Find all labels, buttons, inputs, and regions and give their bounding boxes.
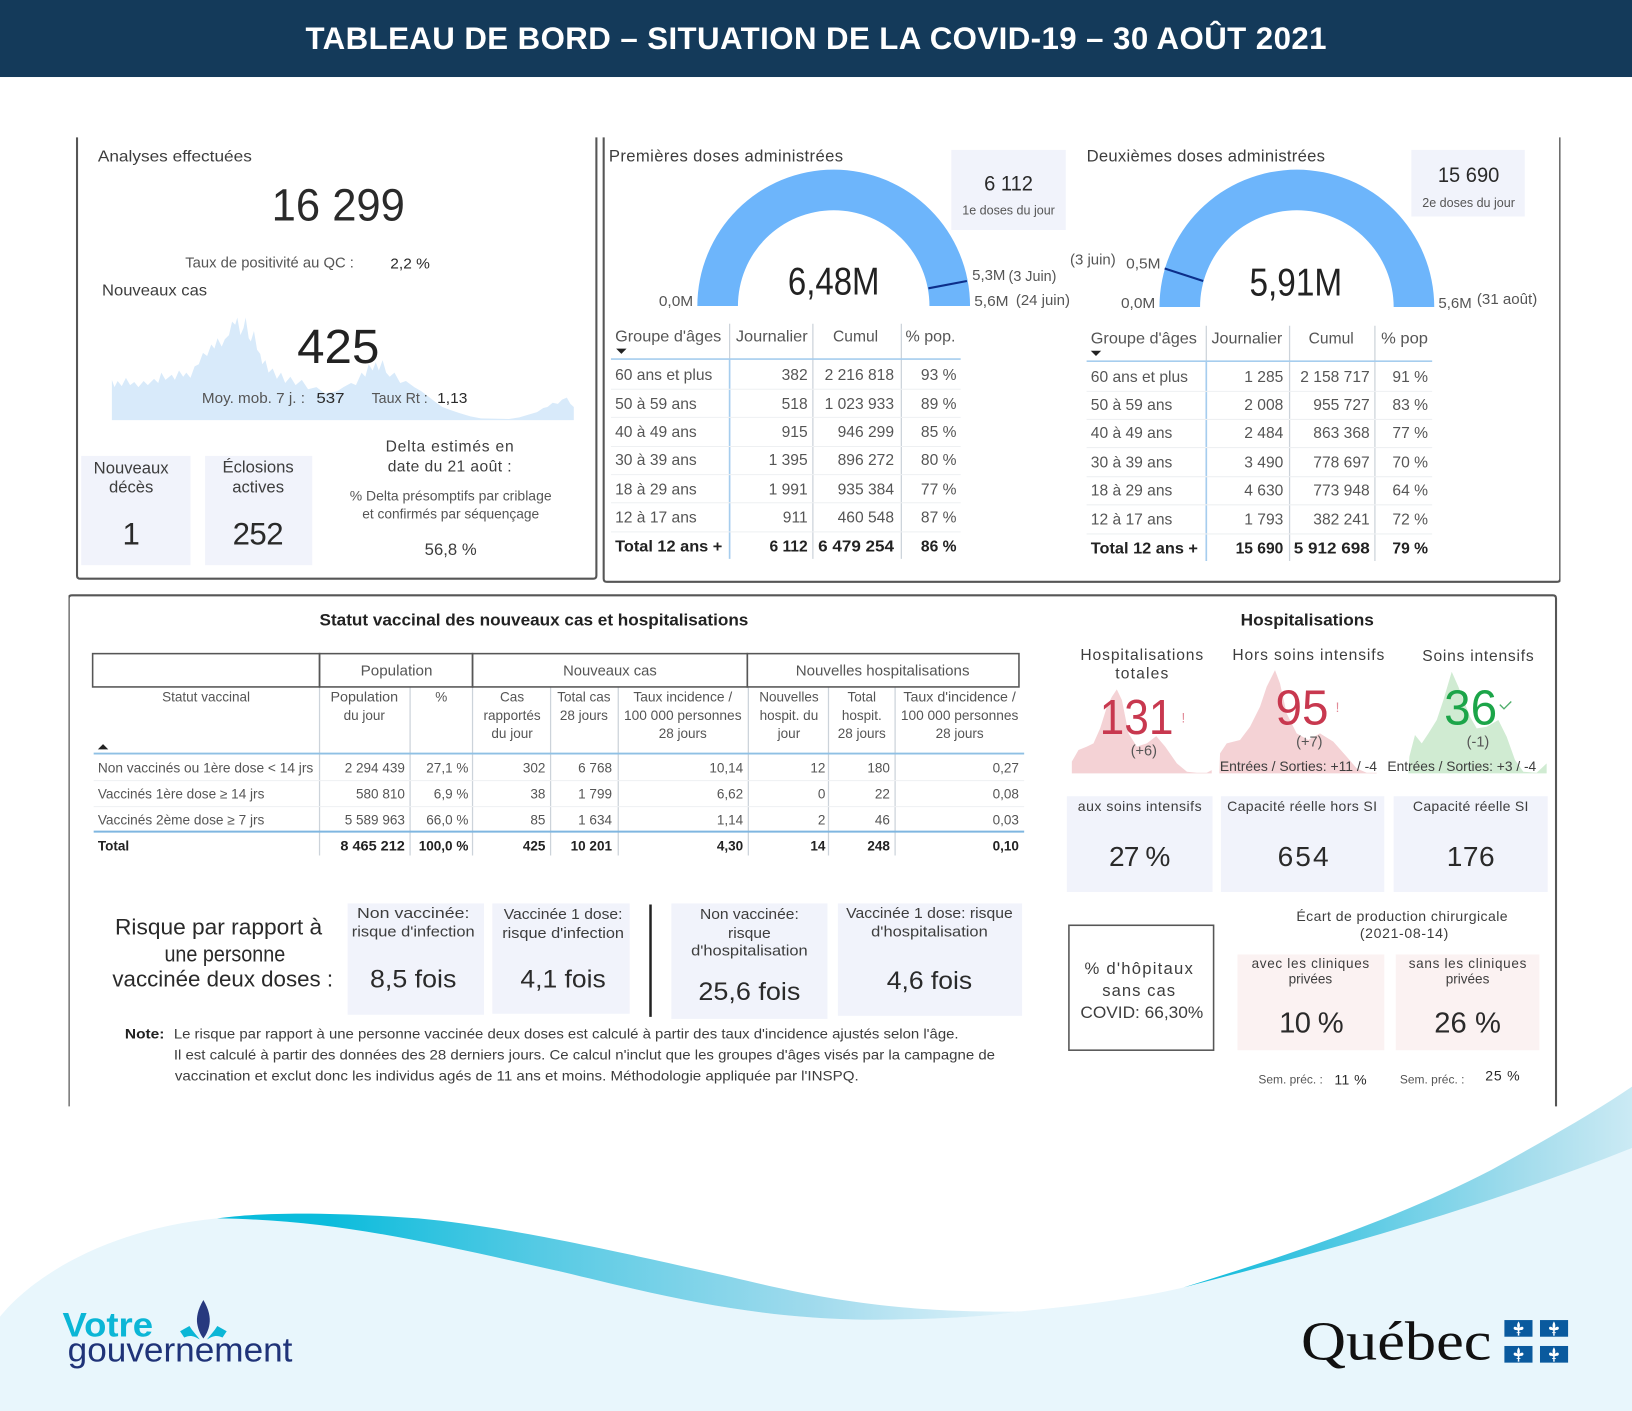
- card: avec les cliniques privées: avec les cliniques: [1252, 956, 1369, 971]
- table: statut vaccinal: 4,30: [717, 838, 743, 853]
- area chart: nouveaux cas: [112, 317, 574, 420]
- card: aux soins intensifs: aux soins intensifs: [1078, 798, 1202, 814]
- table: statut vaccinal: 180: [867, 760, 890, 775]
- table: statut vaccinal: 0: [818, 786, 825, 801]
- note: Le risque par rapport à une personne vaccinée deux doses est calculé à partir des taux d'incidence ajustés selon l'âge.: [174, 1026, 959, 1042]
- header banner: [0, 0, 1632, 77]
- text: semaine précédente: Sem. préc. :: [1400, 1072, 1464, 1086]
- kpi: hospitalisations totales: Hospitalisations: [1080, 647, 1203, 664]
- text block: delta estimés: % Delta présomptifs par criblage: [350, 489, 552, 504]
- text: semaine précédente: Sem. préc. :: [1258, 1072, 1323, 1086]
- table: premières doses par groupe d'âges: 93 %: [921, 367, 957, 384]
- card: risque d'hospitalisation vaccinée 1 dose: [838, 903, 1022, 1016]
- table: statut vaccinal: 0,27: [993, 760, 1019, 775]
- card: risque d'hospitalisation vaccinée 1 dose: 4,6 fois: [887, 967, 972, 995]
- table: deuxièmes doses par groupe d'âges: 773 948: [1313, 482, 1370, 499]
- table: deuxièmes doses par groupe d'âges: Total 12 ans +: [1091, 541, 1198, 558]
- text: taux de positivité: Taux de positivité au QC :: [185, 255, 354, 271]
- table: statut vaccinal: 28 jours: [936, 726, 984, 741]
- table: statut vaccinal: 12: [810, 760, 825, 775]
- gauge: premières doses: 5,3M: [972, 268, 1005, 284]
- card: risque d'hospitalisation non vaccinée: d'hospitalisation: [691, 943, 808, 959]
- table: deuxièmes doses par groupe d'âges: 60 ans et plus: [1091, 369, 1188, 386]
- table: statut vaccinal: Vaccinés 1ère dose ≥ 14 jrs: [98, 786, 265, 801]
- table: statut vaccinal: 425: [523, 838, 546, 853]
- table: statut vaccinal: Total: [98, 838, 129, 853]
- table: deuxièmes doses par groupe d'âges: 70 %: [1392, 454, 1428, 471]
- table: premières doses par groupe d'âges: 87 %: [921, 509, 957, 526]
- gauge: deuxièmes doses: 5,6M: [1438, 296, 1472, 312]
- card: éclosions actives: Éclosions: [223, 458, 294, 477]
- kpi: hors soins intensifs: [1219, 647, 1384, 774]
- card: sans les cliniques privées: privées: [1446, 972, 1490, 987]
- card: capacité réelle SI: Capacité réelle SI: [1413, 798, 1528, 814]
- table: statut vaccinal: 6 768: [578, 760, 612, 775]
- gauge: premières doses: [659, 170, 1070, 310]
- gauge: deuxièmes doses: [1070, 170, 1537, 312]
- kpi: soins intensifs: [1387, 648, 1547, 774]
- table: statut vaccinal: 248: [867, 838, 890, 853]
- card: capacité réelle hors SI: [1221, 796, 1384, 892]
- table: statut vaccinal: Statut vaccinal: [162, 690, 250, 705]
- table: statut vaccinal: du jour: [491, 726, 533, 741]
- kpi: soins intensifs: Soins intensifs: [1422, 648, 1534, 665]
- table: statut vaccinal: 0,03: [993, 812, 1019, 827]
- table: statut vaccinal: 100 000 personnes: [624, 708, 742, 723]
- table: statut vaccinal: 2 294 439: [345, 760, 405, 775]
- table: statut vaccinal: Total: [848, 690, 876, 705]
- table: deuxièmes doses par groupe d'âges: 2 008: [1244, 397, 1283, 414]
- text block: risque par rapport: vaccinée deux doses :: [112, 967, 333, 992]
- card: éclosions actives: 252: [233, 516, 284, 551]
- card: éclosions actives: actives: [232, 477, 284, 496]
- footer background wave: [0, 1087, 1632, 1411]
- table: premières doses par groupe d'âges: Cumul: [833, 328, 878, 345]
- table: deuxièmes doses par groupe d'âges: Groupe d'âges: [1091, 330, 1197, 347]
- kpi: soins intensifs: 36: [1444, 681, 1497, 735]
- card: 2e doses du jour: 2e doses du jour: [1422, 196, 1515, 210]
- card: nouveaux décès: [81, 456, 190, 565]
- table: statut vaccinal: 28 jours: [659, 726, 707, 741]
- text: semaine précédente: 11 %: [1334, 1072, 1367, 1088]
- heading: écart de production chirurgicale: Écart de production chirurgicale: [1296, 908, 1508, 924]
- card: avec les cliniques privées: privées: [1289, 972, 1332, 987]
- table: statut vaccinal: du jour: [344, 708, 385, 723]
- table: statut vaccinal: Nouvelles hospitalisations: [796, 663, 970, 679]
- table: premières doses par groupe d'âges: 2 216 818: [825, 367, 894, 384]
- number: analyses: 16 299: [272, 180, 405, 231]
- table: statut vaccinal: 27,1 %: [426, 760, 468, 775]
- card: risque d'infection non vaccinée: [348, 903, 484, 1015]
- logo: Votre gouvernement: gouvernement: [68, 1331, 293, 1369]
- table: deuxièmes doses par groupe d'âges: 3 490: [1244, 454, 1284, 471]
- table: premières doses par groupe d'âges: 30 à 39 ans: [615, 452, 697, 469]
- text: taux de positivité: [185, 255, 430, 273]
- table: statut vaccinal: 28 jours: [838, 726, 886, 741]
- note: Il est calculé à partir des données des 28 derniers jours. Ce calcul n'inclut que les groupes d'âges visés par la campagne de: [174, 1047, 995, 1063]
- kpi: hospitalisations totales: 131: [1100, 691, 1174, 745]
- table: premières doses par groupe d'âges: 1 395: [769, 452, 808, 469]
- note: [125, 1026, 995, 1083]
- table: premières doses par groupe d'âges: 518: [782, 396, 808, 413]
- kpi: hospitalisations totales: (+6): [1131, 744, 1157, 760]
- table: deuxièmes doses par groupe d'âges: 72 %: [1392, 512, 1428, 529]
- text: moyenne mobile et taux Rt: Taux Rt :: [372, 391, 428, 407]
- kpi: hospitalisations totales: [1072, 647, 1212, 773]
- card: 1e doses du jour: 1e doses du jour: [962, 203, 1055, 217]
- table: premières doses par groupe d'âges: [611, 324, 961, 559]
- kpi: soins intensifs: Entrées / Sorties: +3 / -4: [1387, 759, 1537, 774]
- card: hôpitaux sans cas COVID: COVID: 66,30%: [1080, 1003, 1203, 1022]
- table: deuxièmes doses par groupe d'âges: 5 912 698: [1294, 541, 1370, 558]
- table: statut vaccinal: 46: [875, 812, 890, 827]
- card: 2e doses du jour: [1411, 150, 1525, 216]
- kpi: hors soins intensifs: Entrées / Sorties: +11 / -4: [1220, 759, 1377, 774]
- card: nouveaux décès: Nouveaux: [94, 459, 169, 478]
- table: premières doses par groupe d'âges: 85 %: [921, 424, 957, 441]
- table: statut vaccinal: 85: [530, 812, 545, 827]
- heading: écart de production chirurgicale: [1296, 908, 1508, 941]
- table: premières doses par groupe d'âges: Groupe d'âges: [615, 328, 721, 345]
- table: premières doses par groupe d'âges: 6 112: [769, 539, 808, 556]
- table: premières doses par groupe d'âges: 80 %: [921, 452, 957, 469]
- card: nouveaux décès: décès: [109, 477, 153, 496]
- kpi: hospitalisations totales: totales: [1115, 666, 1169, 683]
- table: deuxièmes doses par groupe d'âges: 2 158 717: [1300, 369, 1370, 386]
- table: premières doses par groupe d'âges: Total 12 ans +: [615, 539, 722, 556]
- table: statut vaccinal: Nouvelles: [759, 690, 819, 705]
- card: nouveaux décès: 1: [122, 516, 140, 551]
- table: deuxièmes doses par groupe d'âges: 778 697: [1313, 454, 1370, 471]
- text: semaine précédente: [1258, 1067, 1520, 1088]
- table: deuxièmes doses par groupe d'âges: 91 %: [1392, 369, 1428, 386]
- table: statut vaccinal: 22: [875, 786, 890, 801]
- panel: doses administrées: [604, 137, 1560, 582]
- table: premières doses par groupe d'âges: 18 à 29 ans: [615, 481, 697, 498]
- card: risque d'infection non vaccinée: risque d'infection: [352, 925, 475, 941]
- table: statut vaccinal: hospit. du: [760, 708, 818, 723]
- table: deuxièmes doses par groupe d'âges: 15 690: [1236, 541, 1284, 558]
- table: premières doses par groupe d'âges: % pop.: [906, 328, 955, 345]
- table: statut vaccinal: 38: [530, 786, 545, 801]
- table: premières doses par groupe d'âges: 89 %: [921, 396, 957, 413]
- table: premières doses par groupe d'âges: 40 à 49 ans: [615, 424, 697, 441]
- table: deuxièmes doses par groupe d'âges: % pop: [1381, 330, 1428, 347]
- kpi: soins intensifs: (-1): [1467, 734, 1489, 750]
- table: deuxièmes doses par groupe d'âges: 955 727: [1313, 397, 1370, 414]
- kpi: hors soins intensifs: 95: [1276, 681, 1329, 735]
- table: premières doses par groupe d'âges: 915: [782, 424, 808, 441]
- table: deuxièmes doses par groupe d'âges: 64 %: [1392, 482, 1428, 499]
- text block: delta estimés: et confirmés par séquençage: [362, 506, 539, 521]
- text block: risque par rapport: une personne: [164, 942, 285, 967]
- table: statut vaccinal: 66,0 %: [426, 812, 468, 827]
- table: statut vaccinal: 0,10: [993, 838, 1019, 853]
- heading: hospitalisations: Hospitalisations: [1241, 611, 1374, 630]
- table: premières doses par groupe d'âges: 896 272: [838, 452, 894, 469]
- card: risque d'hospitalisation vaccinée 1 dose: Vaccinée 1 dose: risque: [846, 906, 1013, 922]
- gauge: premières doses: 5,6M: [974, 294, 1009, 310]
- card: hôpitaux sans cas COVID: % d'hôpitaux: [1085, 959, 1193, 978]
- table: statut vaccinal: Taux d'incidence /: [903, 690, 1016, 705]
- table: statut vaccinal: rapportés: [484, 708, 541, 723]
- gauge: deuxièmes doses: 0,5M: [1126, 257, 1161, 273]
- table: statut vaccinal: Vaccinés 2ème dose ≥ 7 jrs: [98, 812, 265, 827]
- table: statut vaccinal: Population: [361, 663, 432, 679]
- table: premières doses par groupe d'âges: 12 à 17 ans: [615, 509, 697, 526]
- table: deuxièmes doses par groupe d'âges: 30 à 39 ans: [1091, 454, 1173, 471]
- table: statut vaccinal: 302: [523, 760, 545, 775]
- kpi: hors soins intensifs: (+7): [1296, 734, 1323, 750]
- table: premières doses par groupe d'âges: 1 991: [769, 481, 808, 498]
- card: risque d'infection non vaccinée: 8,5 fois: [370, 966, 456, 994]
- table: premières doses par groupe d'âges: 6 479 254: [818, 539, 894, 556]
- card: risque d'hospitalisation non vaccinée: risque: [728, 926, 771, 942]
- text block: delta estimés: date du 21 août :: [388, 458, 512, 475]
- table: premières doses par groupe d'âges: 382: [782, 367, 808, 384]
- text block: delta estimés: Delta estimés en: [386, 439, 514, 456]
- text: moyenne mobile et taux Rt: 1,13: [437, 391, 467, 407]
- table: statut vaccinal: Cas: [500, 690, 524, 705]
- table: premières doses par groupe d'âges: 60 ans et plus: [615, 367, 713, 384]
- table: statut vaccinal: 8 465 212: [340, 838, 405, 853]
- table: deuxièmes doses par groupe d'âges: 1 285: [1244, 369, 1284, 386]
- table: premières doses par groupe d'âges: 50 à 59 ans: [615, 396, 697, 413]
- gauge: deuxièmes doses: (3 juin): [1070, 252, 1116, 268]
- gauge: premières doses: (24 juin): [1016, 293, 1070, 309]
- table: deuxièmes doses par groupe d'âges: 50 à 59 ans: [1091, 397, 1173, 414]
- text: moyenne mobile et taux Rt: 537: [316, 391, 345, 407]
- gauge: deuxièmes doses: 5,91M: [1249, 262, 1342, 305]
- table: statut vaccinal: Non vaccinés ou 1ère dose < 14 jrs: [98, 760, 314, 775]
- table: statut vaccinal: 6,9 %: [434, 786, 468, 801]
- panel: statut vaccinal et hospitalisations: [69, 595, 1556, 1106]
- table: deuxièmes doses par groupe d'âges: 863 368: [1313, 425, 1370, 442]
- table: statut vaccinal: 28 jours: [560, 708, 608, 723]
- table: deuxièmes doses par groupe d'âges: 77 %: [1392, 425, 1428, 442]
- logo: Québec: Québec: [1301, 1310, 1491, 1371]
- table: statut vaccinal: 6,62: [717, 786, 743, 801]
- title: TABLEAU DE BORD – SITUATION DE LA COVID-19 – 30 AOÛT 2021: [305, 20, 1327, 56]
- table: deuxièmes doses par groupe d'âges: 18 à 29 ans: [1091, 482, 1173, 499]
- heading: écart de production chirurgicale: (2021-08-14): [1360, 925, 1448, 941]
- text: moyenne mobile et taux Rt: Moy. mob. 7 j. :: [202, 391, 305, 407]
- table: statut vaccinal: [93, 654, 1024, 856]
- card: risque d'infection non vaccinée: Non vaccinée:: [357, 906, 469, 922]
- gauge: deuxièmes doses: 0,0M: [1121, 296, 1155, 312]
- card: capacité réelle SI: [1394, 796, 1548, 892]
- table: premières doses par groupe d'âges: 77 %: [921, 481, 957, 498]
- table: statut vaccinal: Taux incidence /: [633, 690, 732, 705]
- table: statut vaccinal: 1 799: [578, 786, 612, 801]
- table: deuxièmes doses par groupe d'âges: 382 241: [1313, 512, 1370, 529]
- table: deuxièmes doses par groupe d'âges: 4 630: [1244, 482, 1284, 499]
- card: hôpitaux sans cas COVID: sans cas: [1102, 981, 1175, 1000]
- table: statut vaccinal: 1,14: [717, 812, 744, 827]
- kpi: hospitalisations totales: !: [1182, 710, 1185, 725]
- card: 2e doses du jour: 15 690: [1438, 164, 1499, 187]
- card: aux soins intensifs: 27 %: [1109, 841, 1170, 872]
- card: éclosions actives: [205, 456, 312, 565]
- card: avec les cliniques privées: 10 %: [1279, 1007, 1344, 1039]
- note: vaccination et exclut donc les individus agés de 11 ans et moins. Méthodologie appliquée par l'INSPQ.: [175, 1067, 859, 1083]
- gauge: deuxièmes doses: (31 août): [1477, 292, 1537, 308]
- card: capacité réelle SI: 176: [1447, 841, 1495, 872]
- table: statut vaccinal: 100 000 personnes: [901, 708, 1019, 723]
- text block: risque par rapport: Risque par rapport à: [115, 915, 323, 940]
- table: statut vaccinal: 2: [818, 812, 825, 827]
- text block: delta estimés: [350, 439, 552, 559]
- kpi: hors soins intensifs: !: [1336, 700, 1339, 715]
- icon: drapeau fleurdelisé: [1504, 1320, 1568, 1363]
- card: capacité réelle hors SI: 654: [1278, 841, 1329, 872]
- card: risque d'infection vaccinée 1 dose: [492, 903, 630, 1014]
- table: premières doses par groupe d'âges: 460 548: [838, 509, 894, 526]
- table: statut vaccinal: 1 634: [578, 812, 612, 827]
- table: deuxièmes doses par groupe d'âges: 1 793: [1244, 512, 1283, 529]
- heading: statut vaccinal: Statut vaccinal des nouveaux cas et hospitalisations: [320, 611, 748, 630]
- panel: analyses et nouveaux cas: [77, 137, 596, 579]
- heading: analyses effectuées: Analyses effectuées: [98, 148, 252, 165]
- table: statut vaccinal: 100,0 %: [419, 838, 468, 853]
- card: 1e doses du jour: 6 112: [984, 172, 1033, 195]
- card: risque d'hospitalisation non vaccinée: [671, 903, 827, 1019]
- logo: Québec: [1301, 1310, 1568, 1371]
- table: statut vaccinal: 0,08: [993, 786, 1019, 801]
- card: aux soins intensifs: [1067, 796, 1213, 892]
- table: statut vaccinal: hospit.: [842, 708, 882, 723]
- gauge: premières doses: 0,0M: [659, 294, 693, 310]
- table: deuxièmes doses par groupe d'âges: 40 à 49 ans: [1091, 425, 1173, 442]
- gauge: premières doses: 6,48M: [788, 261, 879, 304]
- card: risque d'infection vaccinée 1 dose: risque d'infection: [502, 926, 624, 942]
- table: premières doses par groupe d'âges: Journalier: [736, 328, 808, 345]
- table: statut vaccinal: 5 589 963: [345, 812, 405, 827]
- table: statut vaccinal: Total cas: [557, 690, 611, 705]
- table: deuxièmes doses par groupe d'âges: 83 %: [1392, 397, 1428, 414]
- logo: Votre gouvernement: [62, 1300, 293, 1369]
- card: sans les cliniques privées: 26 %: [1434, 1007, 1501, 1039]
- text: taux de positivité: 2,2 %: [390, 257, 430, 273]
- card: risque d'hospitalisation non vaccinée: 25,6 fois: [698, 978, 800, 1006]
- card: risque d'infection vaccinée 1 dose: Vaccinée 1 dose:: [504, 907, 622, 923]
- kpi: hors soins intensifs: Hors soins intensifs: [1232, 647, 1384, 664]
- card: sans les cliniques privées: sans les cliniques: [1409, 956, 1527, 971]
- text: semaine précédente: 25 %: [1485, 1067, 1520, 1083]
- table: deuxièmes doses par groupe d'âges: 2 484: [1244, 425, 1284, 442]
- card: risque d'hospitalisation vaccinée 1 dose: d'hospitalisation: [871, 925, 988, 941]
- table: deuxièmes doses par groupe d'âges: 79 %: [1392, 541, 1428, 558]
- text block: delta estimés: 56,8 %: [425, 540, 477, 559]
- card: 1e doses du jour: [951, 150, 1066, 230]
- logo: Votre gouvernement: Votre: [62, 1306, 153, 1344]
- card: capacité réelle hors SI: Capacité réelle hors SI: [1227, 798, 1377, 814]
- table: premières doses par groupe d'âges: 946 299: [838, 424, 894, 441]
- table: statut vaccinal: 14: [810, 838, 826, 853]
- card: risque d'hospitalisation non vaccinée: Non vaccinée:: [700, 907, 799, 923]
- card: hôpitaux sans cas COVID: [1069, 925, 1214, 1050]
- table: statut vaccinal: 10,14: [709, 760, 744, 775]
- card: sans les cliniques privées: [1396, 954, 1539, 1050]
- heading: deuxièmes doses: Deuxièmes doses administrées: [1087, 146, 1325, 165]
- table: statut vaccinal: 580 810: [356, 786, 405, 801]
- table: statut vaccinal: 10 201: [571, 838, 612, 853]
- table: statut vaccinal: Nouveaux cas: [563, 663, 657, 679]
- table: deuxièmes doses par groupe d'âges: 12 à 17 ans: [1091, 512, 1173, 529]
- card: avec les cliniques privées: [1238, 954, 1384, 1050]
- text block: risque par rapport: [112, 915, 333, 992]
- gauge: premières doses: (3 Juin): [1009, 269, 1056, 285]
- table: deuxièmes doses par groupe d'âges: Journalier: [1212, 330, 1282, 347]
- table: premières doses par groupe d'âges: 1 023 933: [825, 396, 894, 413]
- table: deuxièmes doses par groupe d'âges: [1087, 326, 1432, 561]
- text: moyenne mobile et taux Rt: [202, 391, 467, 407]
- table: premières doses par groupe d'âges: 86 %: [921, 539, 957, 556]
- table: statut vaccinal: %: [435, 690, 447, 705]
- table: deuxièmes doses par groupe d'âges: Cumul: [1309, 330, 1354, 347]
- table: statut vaccinal: Population: [330, 690, 398, 705]
- table: premières doses par groupe d'âges: 935 384: [838, 481, 894, 498]
- heading: nouveaux cas: Nouveaux cas: [102, 283, 207, 300]
- number: nouveaux cas: 425: [297, 321, 379, 374]
- table: statut vaccinal: jour: [777, 726, 801, 741]
- note: Note:: [125, 1026, 164, 1042]
- card: risque d'infection vaccinée 1 dose: 4,1 fois: [520, 966, 606, 994]
- heading: premières doses: Premières doses administrées: [609, 146, 843, 165]
- table: premières doses par groupe d'âges: 911: [783, 509, 808, 526]
